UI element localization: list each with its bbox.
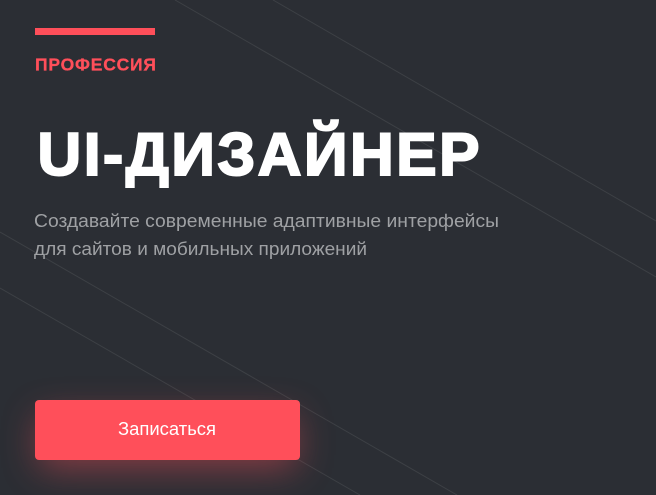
button (35, 400, 300, 460)
eyebrow label: ПРОФЕССИЯ (35, 54, 156, 74)
subtitle: для сайтов и мобильных приложений (34, 239, 367, 259)
subtitle: Создавайте современные адаптивные интерфейсы (34, 211, 499, 231)
button label: Записаться (118, 419, 216, 439)
title: UI-ДИЗАЙНЕР (38, 119, 480, 188)
accent bar (35, 28, 155, 35)
subtitle (34, 211, 499, 259)
